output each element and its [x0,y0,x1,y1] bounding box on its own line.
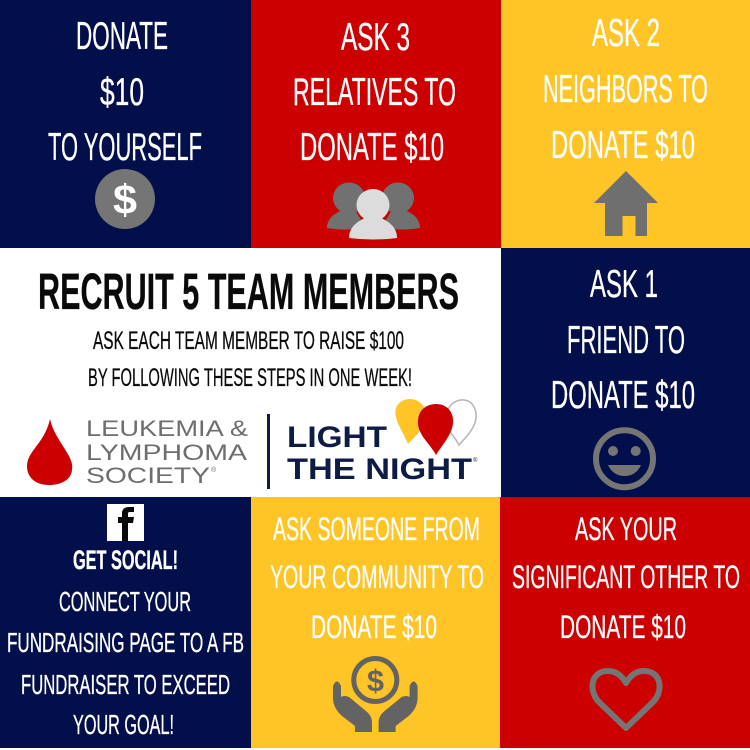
text: connect your fundraising page: FUNDRAISING PAGE TO A FB [7,627,244,658]
panel: ask someone from community [251,497,500,748]
icon: house [594,171,658,236]
text: donate to yourself: DONATE [76,15,168,58]
text: ask someone from community: DONATE $10 [311,609,437,645]
divider [267,414,270,489]
text: donate to yourself [48,15,202,169]
icon: blood drop [27,419,72,485]
icon: heart [592,671,660,728]
icon: group of people [327,182,420,240]
icon: hands holding coin: $ [367,663,384,698]
logo text: leukemia and lymphoma society: LYMPHOMA [86,440,247,465]
logo text: light the night: ® [473,457,478,464]
text: donate to yourself: TO YOURSELF [48,126,202,169]
icon: dollar coin: $ [113,176,137,223]
text: ask 3 relatives: DONATE $10 [300,126,444,169]
panel: ask 3 relatives [251,0,501,248]
text: connect your fundraising page: FUNDRAISER TO EXCEED [21,669,230,700]
text: ask 3 relatives [293,16,456,169]
logo text: light the night: THE NIGHT [287,453,472,486]
logo text: leukemia and lymphoma society: ® [211,466,217,474]
panel: donate to yourself [0,0,251,248]
text: instructions: ASK EACH TEAM MEMBER TO RAISE $100 [93,327,404,355]
icon: facebook [107,504,144,541]
logo text: light the night [287,421,478,486]
icon: hands holding coin [333,658,418,732]
panel: ask significant other [500,497,750,748]
text: ask 3 relatives: RELATIVES TO [293,71,456,114]
icon: dollar coin [95,169,155,229]
panel: ask 2 neighbors [501,0,750,248]
panel: recruit team members [0,248,501,497]
icon: smiley face [596,430,653,487]
logo text: leukemia and lymphoma society: SOCIETY [86,463,210,488]
text: ask 2 neighbors [543,12,708,167]
panel: get social [0,497,251,748]
text: ask significant other: DONATE $10 [560,609,686,645]
text: connect your fundraising page: YOUR GOAL! [73,709,174,740]
text: get social: GET SOCIAL! [73,545,178,575]
text: connect your fundraising page: CONNECT YOUR [59,586,191,617]
text: instructions: BY FOLLOWING THESE STEPS IN ONE WEEK! [88,364,412,392]
text: ask 3 relatives: ASK 3 [341,16,410,59]
title: RECRUIT 5 TEAM MEMBERS [38,263,459,320]
icon: balloons [395,399,476,455]
text: ask 1 friend: ASK 1 [590,263,658,306]
text: ask 1 friend [551,263,695,417]
text: ask significant other: ASK YOUR [575,511,677,547]
text: ask someone from community: YOUR COMMUNITY TO [270,559,484,595]
text: ask significant other [512,511,740,645]
text: donate to yourself: $10 [100,71,144,114]
text: ask someone from community: ASK SOMEONE FROM [273,511,480,547]
text: connect your fundraising page [7,586,244,740]
logo text: leukemia and lymphoma society [86,416,248,488]
text: ask someone from community [270,511,484,645]
logo text: light the night: LIGHT [287,421,387,454]
logo text: leukemia and lymphoma society: LEUKEMIA & [86,416,248,441]
panel: ask 1 friend [501,248,750,497]
text: ask 2 neighbors: ASK 2 [592,12,660,55]
text: instructions [88,327,412,392]
